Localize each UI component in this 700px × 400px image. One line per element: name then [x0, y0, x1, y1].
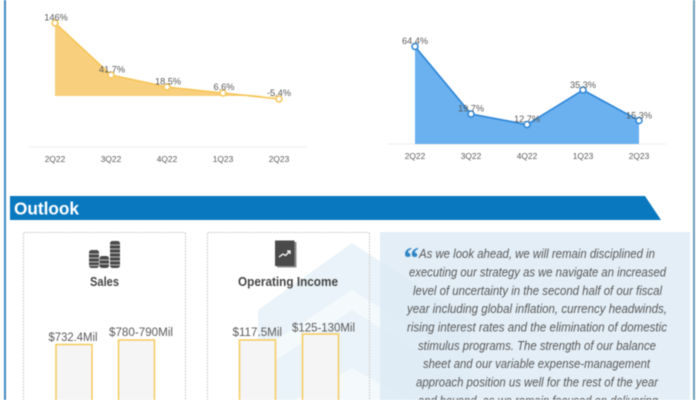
chart: blue area chart: 2Q22 [405, 151, 426, 161]
chart: yellow area chart: 2Q22 [45, 154, 66, 164]
panel: sales: $732.4Mil [48, 332, 98, 344]
bar: sales outlook [118, 340, 154, 400]
chart: yellow area chart: -5.4% [267, 88, 291, 98]
panel: quote [380, 232, 690, 400]
chart: blue area chart [388, 36, 666, 161]
panel: operating income [208, 232, 370, 400]
icon: report with growth arrow [275, 240, 296, 268]
chart: yellow area chart: 41.7% [99, 64, 125, 74]
bar: operating income prior [240, 340, 276, 400]
chart: yellow area chart: 2Q23 [269, 154, 290, 164]
chart: yellow area chart: 6.6% [214, 82, 234, 92]
quote text: executing our strategy as we navigate an increased [409, 266, 667, 280]
panel: sales: Sales [90, 275, 119, 289]
chart: blue area chart: 15.3% [626, 110, 652, 120]
chart: yellow area chart: 18.5% [155, 76, 181, 86]
quote text: level of uncertainty in the second half of our fiscal [413, 284, 663, 298]
quote text [406, 247, 668, 400]
chart: blue area chart: 12.7% [514, 114, 540, 124]
chart: blue area chart: 35.3% [570, 80, 596, 90]
background chevrons [258, 243, 470, 400]
chart: blue area chart: 3Q22 [461, 151, 482, 161]
panel: operating income: Operating Income [238, 274, 338, 289]
quote text: rising interest rates and the elimination of domestic [407, 320, 668, 334]
chart: yellow area chart: 146% [44, 12, 68, 22]
icon: coin stacks [89, 241, 120, 268]
quote text: stimulus programs. The strength of our balance [418, 339, 656, 353]
chart: yellow area chart: 1Q23 [213, 154, 234, 164]
chart: blue area chart: 1Q23 [573, 151, 594, 161]
quote text: sheet and our variable expense-management [423, 357, 650, 371]
chart: yellow area chart [28, 12, 307, 164]
quote text: year including global inflation, currency headwinds, [406, 302, 667, 316]
quote text: As we look ahead, we will remain disciplined in [418, 247, 655, 261]
chart: blue area chart: 2Q23 [629, 151, 650, 161]
section banner: Outlook: Outlook [14, 198, 79, 218]
section banner: Outlook [10, 196, 661, 220]
quote text: approach position us well for the rest of the year [416, 376, 659, 390]
panel: sales: $780-790Mil [109, 327, 173, 339]
chart: blue area chart: 19.7% [458, 104, 484, 114]
panel: operating income: $117.5Mil [232, 327, 282, 339]
chart: yellow area chart: 3Q22 [101, 154, 122, 164]
panel: sales [24, 232, 186, 400]
bar: sales prior [56, 344, 92, 400]
bar: operating income outlook [302, 334, 338, 400]
panel: operating income: $125-130Mil [292, 322, 355, 334]
chart: blue area chart: 64.4% [402, 36, 428, 46]
chart: blue area chart: 4Q22 [517, 151, 538, 161]
icon: quotation mark: “ [404, 240, 419, 275]
chart: yellow area chart: 4Q22 [157, 154, 178, 164]
